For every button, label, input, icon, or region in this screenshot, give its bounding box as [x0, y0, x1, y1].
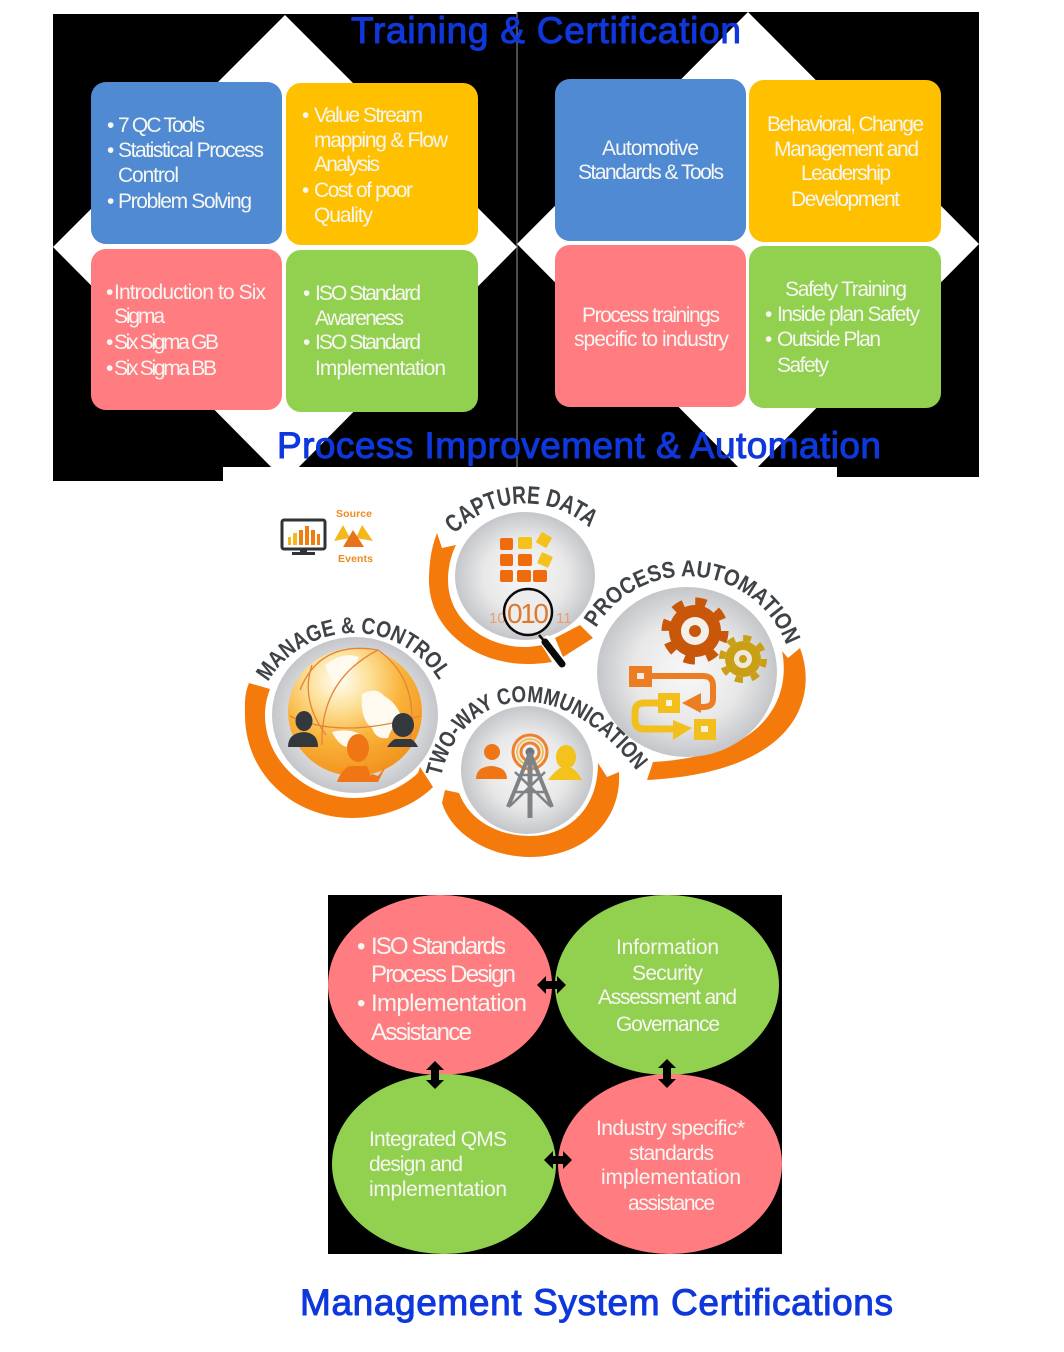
box: behavioral change [749, 80, 941, 242]
icon: globe [288, 648, 422, 776]
box: quality tools: Statistical Process [118, 139, 264, 162]
icon: radio tower [508, 735, 552, 818]
box: value stream: • [302, 104, 309, 127]
box: six sigma: Six Sigma BB [114, 357, 217, 380]
diagram: manage and control [244, 617, 448, 818]
arrow: bottom horizontal [544, 1151, 572, 1169]
box: automotive standards: Automotive [602, 137, 699, 160]
circle: information security: Security [632, 962, 704, 985]
box: quality tools: Control [118, 164, 179, 187]
diagram: process automation [584, 560, 806, 780]
circle: ISO standards [328, 895, 552, 1075]
arrow: left vertical [426, 1061, 444, 1089]
box: safety training [749, 246, 941, 408]
box: safety training: • [765, 328, 772, 351]
circle: information security: Information [616, 936, 719, 959]
box: safety training: Safety [777, 354, 830, 377]
icon: magnifier over binary: 11 [556, 610, 572, 627]
label: manage and control: MANAGE & CONTROL [256, 617, 448, 681]
box: behavioral change: Leadership [801, 162, 891, 185]
icon: monitor and source events: Source [336, 508, 372, 520]
box: ISO standard: • [303, 282, 310, 305]
box: ISO standard [286, 250, 478, 412]
diagram: capture data [429, 486, 596, 668]
heading: training and certification: Training & Certification [351, 10, 741, 51]
box: behavioral change: Management and [774, 138, 919, 161]
icon: yellow person [548, 745, 582, 780]
circle: integrated QMS: Integrated QMS [369, 1128, 507, 1151]
box: quality tools [91, 82, 282, 244]
box: six sigma [91, 249, 282, 410]
box: six sigma: • [106, 357, 113, 380]
circle: ISO standards: Process Design [371, 961, 516, 988]
circle: industry specific: implementation [601, 1166, 741, 1189]
icon: orange person [476, 744, 507, 779]
icon: flow chart [629, 666, 716, 740]
box: value stream: Cost of poor [314, 179, 413, 202]
box: value stream: mapping & Flow [314, 129, 449, 152]
box: quality tools: 7 QC Tools [118, 114, 205, 137]
icon: monitor and source events: Events [338, 553, 373, 565]
box: process trainings [555, 245, 746, 407]
panel: left quadrant matrix [53, 14, 523, 483]
box: safety training: Safety Training [785, 278, 907, 301]
panel: right quadrant matrix [510, 12, 979, 479]
box: safety training: Inside plan Safety [777, 303, 920, 326]
box: automotive standards: Standards & Tools [578, 161, 724, 184]
box: ISO standard: • [303, 331, 310, 354]
box: safety training: Outside Plan [777, 328, 881, 351]
icon: small gear [722, 638, 764, 680]
circle: ISO standards: Assistance [371, 1019, 472, 1046]
panel: management system circles [328, 895, 782, 1254]
icon: magnifier over binary: 10 [489, 610, 506, 627]
label: two-way communication: TWO-WAY COMMUNICATION [426, 686, 648, 774]
icon: large gear [666, 602, 724, 660]
arrow: right vertical [658, 1059, 676, 1088]
box: behavioral change: Behavioral, Change [767, 113, 924, 136]
box: value stream: • [302, 179, 309, 202]
circle: industry specific: assistance [628, 1192, 715, 1215]
icon: magnifier over binary: 010 [507, 598, 549, 629]
circle: ISO standards: • [357, 933, 365, 960]
circle: ISO standards: • [357, 990, 365, 1017]
box: six sigma: Sigma [114, 305, 165, 328]
circle: ISO standards: Implementation [371, 990, 527, 1017]
box: quality tools: • [107, 114, 114, 137]
heading: management system certifications: Management System Certifications [300, 1282, 893, 1323]
box: value stream [286, 83, 478, 245]
circle: information security: Assessment and [598, 986, 737, 1009]
circle: information security: Governance [616, 1013, 720, 1036]
box: value stream: Analysis [314, 153, 380, 176]
arrow: top horizontal [537, 976, 566, 994]
box: ISO standard: Implementation [315, 357, 446, 380]
box: behavioral change: Development [791, 188, 900, 211]
heading: process improvement and automation: Process Improvement & Automation [277, 425, 881, 466]
circle: industry specific: standards [629, 1142, 714, 1165]
box: quality tools: Problem Solving [118, 190, 252, 213]
circle: industry specific [558, 1074, 782, 1254]
icon: magnifier over binary [489, 589, 572, 665]
box: six sigma: • [106, 331, 113, 354]
box: quality tools: • [107, 139, 114, 162]
box: ISO standard: Awareness [315, 307, 404, 330]
circle: integrated QMS: design and [369, 1153, 463, 1176]
box: value stream: Value Stream [314, 104, 423, 127]
circle: ISO standards: ISO Standards [371, 933, 506, 960]
box: process trainings: Process trainings [582, 304, 720, 327]
circle: integrated QMS: implementation [369, 1178, 507, 1201]
box: six sigma: Six Sigma GB [114, 331, 219, 354]
icon: woman [387, 713, 418, 747]
box: value stream: Quality [314, 204, 374, 227]
circle: information security [555, 895, 779, 1075]
box: automotive standards [555, 79, 746, 241]
box: six sigma: Introduction to Six [114, 281, 266, 304]
label: capture data: CAPTURE DATA [446, 486, 596, 531]
icon: monitor and source events [282, 508, 373, 565]
box: safety training: • [765, 303, 772, 326]
diagram: two-way communication [426, 686, 648, 857]
box: quality tools: • [107, 190, 114, 213]
icon: business person [288, 711, 318, 747]
icon: orange person [337, 734, 386, 782]
circle: integrated QMS [332, 1074, 556, 1254]
icon: data blocks [500, 532, 553, 582]
box: six sigma: • [106, 281, 113, 304]
box: ISO standard: ISO Standard [315, 282, 421, 305]
box: ISO standard: ISO Standard [315, 331, 421, 354]
label: process automation: PROCESS AUTOMATION [584, 560, 800, 644]
box: process trainings: specific to industry [574, 328, 730, 351]
circle: industry specific: Industry specific* [596, 1117, 745, 1140]
